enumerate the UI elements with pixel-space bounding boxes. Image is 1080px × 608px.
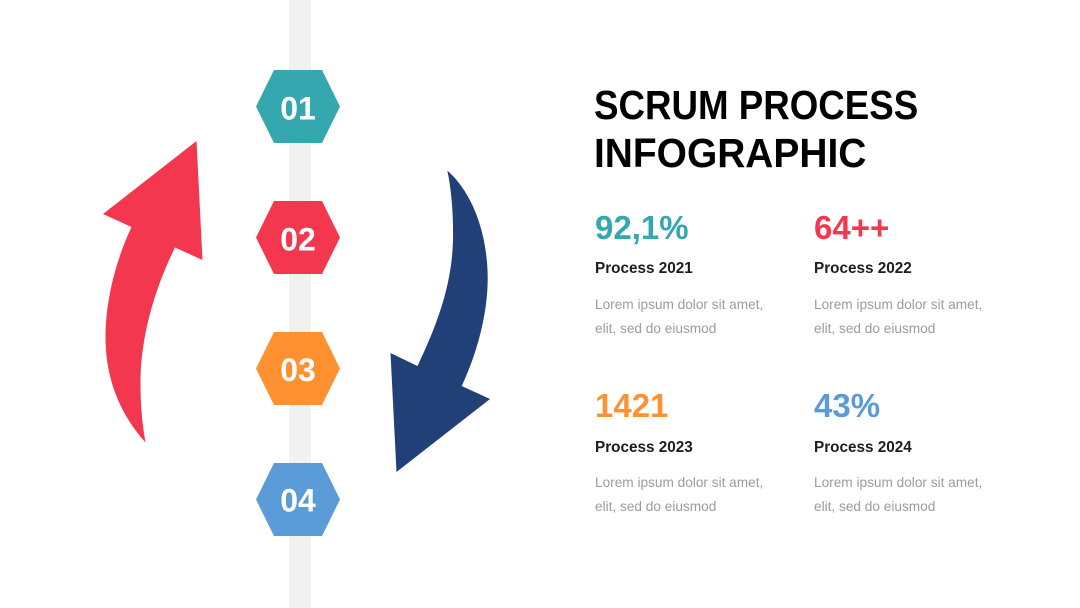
arrow: red upward	[103, 141, 202, 442]
hexagon 04: 04	[280, 482, 316, 518]
hexagon 02	[256, 201, 340, 274]
hexagon 03: 03	[280, 352, 316, 388]
stat block: 2022: elit, sed do eiusmod	[814, 321, 935, 336]
stat block: 2024: Process 2024	[814, 439, 912, 456]
title: SCRUM PROCESS	[594, 82, 918, 128]
title	[594, 82, 918, 176]
stat block: 2024: 43%	[814, 387, 880, 424]
stat block: 2023: elit, sed do eiusmod	[595, 499, 716, 514]
stat block: 2021	[595, 209, 763, 336]
stat block: 2023	[595, 387, 763, 514]
hexagon 03	[256, 332, 340, 405]
title: INFOGRAPHIC	[594, 130, 866, 176]
stat block: 2024: Lorem ipsum dolor sit amet,	[814, 475, 982, 490]
stat block: 2021: Process 2021	[595, 260, 693, 277]
hexagon 01: 01	[280, 90, 316, 126]
stat block: 2023: 1421	[595, 387, 668, 424]
stat block: 2021: 92,1%	[595, 209, 689, 246]
stat block: 2021: Lorem ipsum dolor sit amet,	[595, 297, 763, 312]
stat block: 2022: Process 2022	[814, 260, 912, 277]
stat block: 2022	[814, 209, 982, 336]
stat block: 2022: 64++	[814, 209, 889, 246]
stat block: 2023: Lorem ipsum dolor sit amet,	[595, 475, 763, 490]
hexagon 04	[256, 463, 340, 536]
stat block: 2023: Process 2023	[595, 439, 693, 456]
stat block: 2021: elit, sed do eiusmod	[595, 321, 716, 336]
stat block: 2022: Lorem ipsum dolor sit amet,	[814, 297, 982, 312]
hexagon 01	[256, 70, 340, 143]
arrow: blue downward	[390, 170, 490, 472]
stat block: 2024	[814, 387, 982, 514]
central vertical bar	[289, 0, 311, 608]
hexagon 02: 02	[280, 222, 316, 258]
stat block: 2024: elit, sed do eiusmod	[814, 499, 935, 514]
